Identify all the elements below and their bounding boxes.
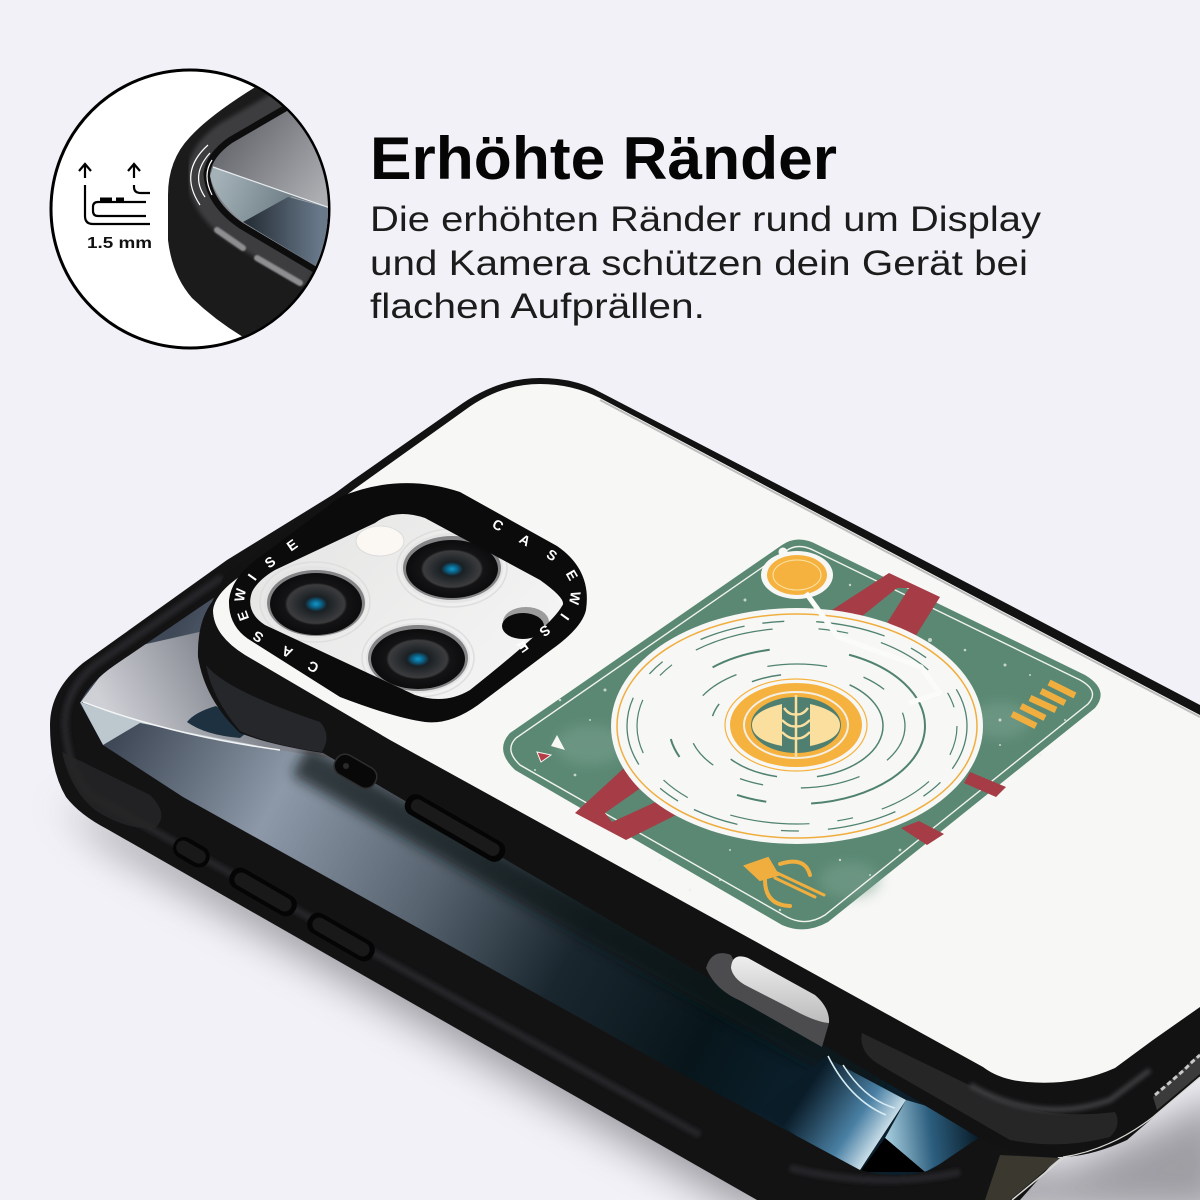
- CASEWISE lettering: W: [231, 586, 249, 603]
- artwork tonearm pivot: [761, 548, 833, 599]
- CASEWISE lettering: W: [566, 590, 584, 607]
- CASEWISE lettering: E: [234, 609, 252, 623]
- front phone speaker ridge: [1153, 1053, 1200, 1110]
- CASEWISE lettering: A: [279, 643, 295, 661]
- CASEWISE lettering: S: [537, 622, 553, 640]
- description text: Die erhöhten Ränder rund um Display: [370, 200, 1042, 239]
- record center label: [725, 679, 867, 771]
- CASEWISE lettering: E: [563, 567, 581, 583]
- description text: [370, 200, 1042, 326]
- rear phone button: volume down: [303, 909, 379, 965]
- camera window: [250, 514, 562, 699]
- front phone back plate: [213, 384, 1200, 1083]
- rear phone side grip: [62, 752, 161, 828]
- artwork red tab bottom: [901, 821, 944, 845]
- CASEWISE lettering: I: [244, 571, 260, 583]
- wallpaper blue rays: [788, 1057, 906, 1170]
- wallpaper light zone: [80, 632, 332, 758]
- front phone chrome button: [706, 953, 829, 1047]
- lens 3: [362, 619, 474, 697]
- inset lower dark wedge: [175, 260, 262, 337]
- icon: 1.5 mm raised edge diagram: [79, 164, 150, 224]
- CASEWISE lettering: E: [284, 536, 300, 554]
- artwork red tab right: [964, 772, 1006, 797]
- inset curved arcs: [191, 145, 212, 205]
- CASEWISE lettering: S: [250, 628, 266, 646]
- inset circle: raised edge close-up: [51, 60, 340, 350]
- lens 2: [397, 529, 507, 607]
- front phone bottom rim: [1063, 1077, 1200, 1157]
- rear phone button: volume up: [225, 864, 301, 920]
- artwork worn speckles: [534, 584, 1066, 911]
- inset inner rim: [210, 111, 317, 267]
- front phone button: mute switch: [330, 750, 380, 792]
- front phone corner grip: [861, 1033, 1118, 1144]
- CASEWISE lettering: S: [262, 553, 278, 571]
- artwork green deck: [503, 540, 1101, 929]
- artwork yellow switches: [1012, 682, 1075, 726]
- camera bumper ring: [229, 483, 587, 722]
- front phone bumper: [198, 378, 1200, 1157]
- rear phone button: action: [169, 833, 214, 872]
- CASEWISE lettering: S: [544, 546, 560, 564]
- CASEWISE lettering: C: [490, 516, 506, 534]
- rear phone bumper soft highlight: [65, 577, 960, 1180]
- shadow cast by front phone: [300, 760, 880, 1085]
- camera flash: [356, 526, 404, 556]
- inset phone bumper: [168, 88, 312, 336]
- artwork deck outline: [511, 546, 1092, 922]
- lidar sensor: [502, 607, 549, 639]
- artwork red handle top: [832, 573, 940, 637]
- title: Erhöhte Ränder: [370, 125, 837, 192]
- description text: flachen Aufprällen.: [370, 287, 705, 326]
- artwork triangles: [537, 735, 565, 762]
- CASEWISE lettering: C: [305, 658, 321, 676]
- lens 1: [260, 562, 370, 642]
- rear phone bumper: [50, 478, 1060, 1200]
- CASEWISE lettering: I: [557, 611, 573, 623]
- inset bumper highlight band: [210, 111, 317, 267]
- camera module: [229, 483, 587, 722]
- inset screen: [210, 111, 328, 266]
- case artwork: turntable: [503, 540, 1101, 929]
- artwork vinyl record: [611, 608, 983, 844]
- rear phone screen: [80, 598, 978, 1175]
- description text: und Kamera schützen dein Gerät bei: [370, 244, 1028, 283]
- front phone button: side button: [401, 790, 509, 866]
- artwork worn patches: [555, 702, 1030, 898]
- phone shadow: [60, 800, 1200, 1200]
- CASEWISE lettering: E: [515, 638, 531, 656]
- inset button highlights: [217, 230, 300, 283]
- CASEWISE lettering: [231, 516, 584, 676]
- record grooves: [627, 621, 967, 831]
- front phone corner highlight: [970, 1070, 1150, 1110]
- rear phone silver edge: [985, 1155, 1060, 1200]
- artwork red handle bottom-left: [575, 768, 680, 840]
- rear phone: [50, 478, 1063, 1200]
- CASEWISE lettering: A: [517, 531, 533, 549]
- plate top edge shading: [600, 400, 1200, 717]
- front phone camera grip: [206, 665, 327, 752]
- front phone: [198, 378, 1200, 1157]
- artwork tonearm: [806, 593, 940, 703]
- artwork emblem: mythosaur: [745, 858, 824, 906]
- label: 1.5 mm: 1.5 mm: [87, 235, 152, 252]
